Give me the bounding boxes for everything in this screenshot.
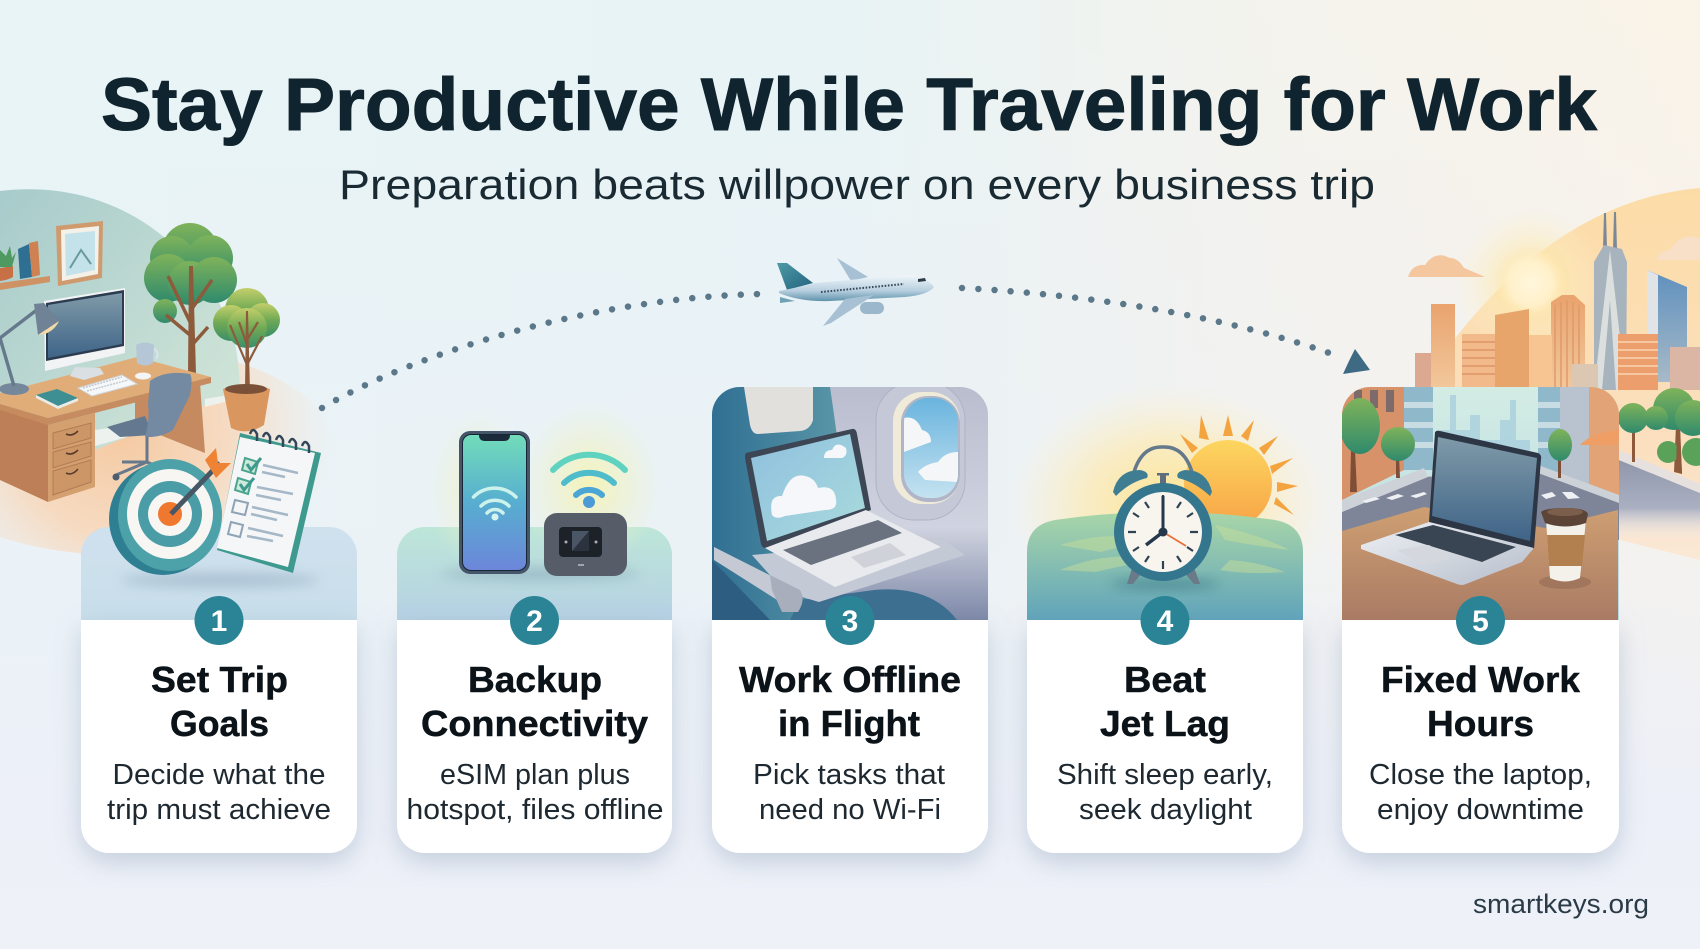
number badge 1: 1 <box>211 605 227 638</box>
card 1 heading: Goals <box>170 703 269 744</box>
card 3 heading: in Flight <box>778 703 920 744</box>
number badge 2: 2 <box>526 605 543 638</box>
icon shadow <box>120 573 320 587</box>
computer monitor <box>44 288 125 380</box>
skyscrapers <box>1415 212 1700 390</box>
number badge 2 <box>510 596 559 645</box>
card 5 heading: Hours <box>1427 703 1534 744</box>
street and trees right of card <box>1618 388 1700 540</box>
coffee cup <box>1539 508 1591 589</box>
arrowhead <box>1343 349 1370 374</box>
card 2 heading: Backup <box>468 659 602 700</box>
website credit: smartkeys.org <box>1473 889 1649 919</box>
cabin window <box>876 382 965 520</box>
card 1: set trip goals <box>81 430 357 853</box>
trees behind desk <box>144 223 280 431</box>
card 2: backup connectivity <box>397 403 672 853</box>
desk <box>0 357 211 502</box>
card 2 description: eSIM plan plus <box>440 759 630 791</box>
desk lamp <box>0 303 59 395</box>
card 3 body <box>712 620 988 853</box>
card 2 body <box>397 620 672 853</box>
icon: airplane <box>777 258 934 326</box>
number badge 1 <box>194 596 244 645</box>
number badge 3 <box>826 596 874 645</box>
airplane cabin illustration <box>712 382 988 620</box>
clouds <box>1408 236 1700 277</box>
framed picture <box>56 221 103 286</box>
number badge 4 <box>1140 596 1190 645</box>
icon: wifi signal <box>553 455 625 506</box>
card 1 body <box>81 620 357 853</box>
coffee mug <box>136 342 158 366</box>
card 1 heading: Set Trip <box>151 659 288 700</box>
card 5 body <box>1342 620 1619 853</box>
card 5: fixed work hours <box>1340 387 1619 853</box>
card 3 description: Pick tasks that <box>753 759 945 791</box>
number badge 3: 3 <box>842 605 858 638</box>
card 1 description: trip must achieve <box>107 794 331 826</box>
card 1 description: Decide what the <box>112 759 326 791</box>
icon: smartphone <box>459 431 530 574</box>
card 2 description: hotspot, files offline <box>406 794 664 826</box>
dotted flight path <box>322 288 1335 408</box>
card 3: work offline in flight <box>712 382 988 853</box>
card 4 heading: Beat <box>1124 659 1206 700</box>
card 4 description: seek daylight <box>1079 794 1252 826</box>
illustration: home office scene <box>0 189 335 555</box>
street trees <box>1340 398 1572 492</box>
wall shelf with books and plant <box>0 241 50 290</box>
card 4 heading: Jet Lag <box>1100 703 1230 744</box>
subtitle: Preparation beats willpower on every business trip <box>339 161 1375 208</box>
icon: rising sun with rays <box>1180 415 1298 528</box>
card 4 description: Shift sleep early, <box>1057 759 1273 791</box>
number badge 4: 4 <box>1157 605 1174 638</box>
card 4: beat jet lag <box>1010 385 1330 853</box>
card 4 body <box>1027 620 1303 853</box>
open laptop <box>1361 431 1541 585</box>
keyboard, mouse, book <box>36 372 151 409</box>
laptop on tray <box>714 429 965 612</box>
card 5 heading: Fixed Work <box>1381 659 1581 700</box>
card 5 description: enjoy downtime <box>1377 794 1584 826</box>
city street illustration <box>1340 387 1619 620</box>
icon: alarm clock <box>1113 447 1212 584</box>
title: Stay Productive While Traveling for Work <box>101 63 1598 146</box>
icon: checklist notepad <box>217 430 321 573</box>
card 3 heading: Work Offline <box>739 659 961 700</box>
number badge 5 <box>1456 596 1505 645</box>
number badge 5: 5 <box>1472 605 1489 638</box>
icon: mobile hotspot device <box>544 513 627 576</box>
card 3 description: need no Wi-Fi <box>759 794 941 826</box>
card 5 description: Close the laptop, <box>1369 759 1592 791</box>
office chair <box>107 373 192 480</box>
icon: target with arrow <box>109 448 231 575</box>
illustration: right city skyline <box>1408 188 1700 560</box>
card 2 heading: Connectivity <box>421 703 648 744</box>
